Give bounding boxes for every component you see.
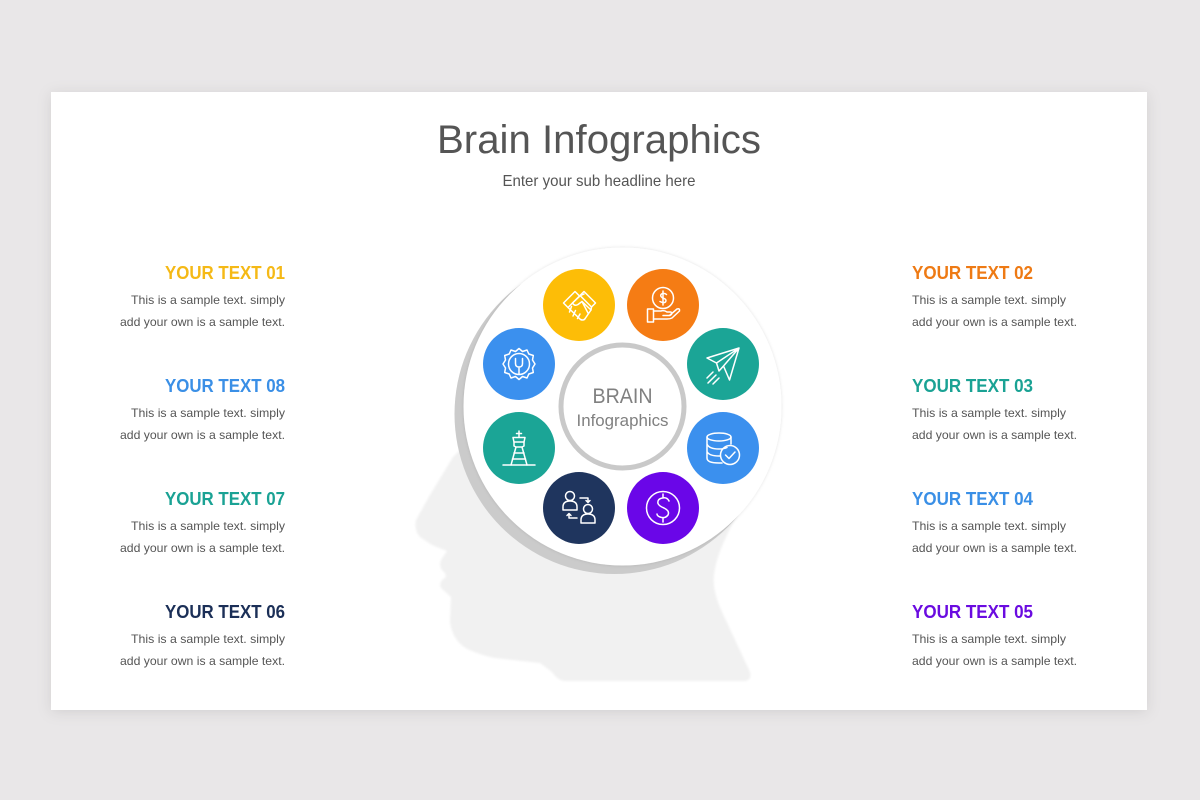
text block 06: This is a sample text. simply [131, 632, 285, 646]
icon: chess king [483, 412, 555, 484]
icon: dollar coin [627, 472, 699, 544]
icon: handshake [543, 269, 615, 341]
icon: gear wrench [483, 328, 555, 400]
text block 06: YOUR TEXT 06 [165, 602, 285, 622]
text block 01: This is a sample text. simply [131, 293, 285, 307]
text block 02: YOUR TEXT 02 [912, 263, 1033, 283]
text block 03: This is a sample text. simply [912, 406, 1066, 420]
text block 02 [912, 263, 1077, 329]
text block 02: This is a sample text. simply [912, 293, 1066, 307]
icon: people exchange [543, 472, 615, 544]
text block 08: add your own is a sample text. [120, 428, 285, 442]
text block 07 [120, 489, 285, 555]
text block 01: add your own is a sample text. [120, 315, 285, 329]
text block 03: add your own is a sample text. [912, 428, 1077, 442]
text block 04: This is a sample text. simply [912, 519, 1066, 533]
text block 08: This is a sample text. simply [131, 406, 285, 420]
text block 03: YOUR TEXT 03 [912, 376, 1033, 396]
text block 05: add your own is a sample text. [912, 654, 1077, 668]
text block 01: YOUR TEXT 01 [165, 263, 285, 283]
white wheel disc [464, 248, 782, 566]
text block 06: add your own is a sample text. [120, 654, 285, 668]
text block 05: This is a sample text. simply [912, 632, 1066, 646]
head silhouette [416, 440, 760, 681]
center ring label: Infographics [576, 411, 668, 430]
text block 07: This is a sample text. simply [131, 519, 285, 533]
text block 02: add your own is a sample text. [912, 315, 1077, 329]
gray disc behind wheel [454, 254, 774, 574]
center ring label: BRAIN [592, 385, 652, 408]
text block 06 [120, 602, 285, 668]
text block 03 [912, 376, 1077, 442]
text block 08 [120, 376, 285, 442]
text block 07: YOUR TEXT 07 [165, 489, 285, 509]
title: Brain Infographics [437, 118, 761, 162]
text block 07: add your own is a sample text. [120, 541, 285, 555]
text block 01 [120, 263, 285, 329]
text block 04: add your own is a sample text. [912, 541, 1077, 555]
icon: hand holding coin [627, 269, 699, 341]
text block 04 [912, 489, 1077, 555]
text block 05 [912, 602, 1077, 668]
text block 08: YOUR TEXT 08 [165, 376, 285, 396]
center ring label [561, 345, 684, 468]
icon: paper plane [687, 328, 759, 400]
subtitle: Enter your sub headline here [502, 173, 696, 190]
white slide card [51, 92, 1147, 710]
icon: database check [687, 412, 759, 484]
text block 05: YOUR TEXT 05 [912, 602, 1033, 622]
text block 04: YOUR TEXT 04 [912, 489, 1033, 509]
